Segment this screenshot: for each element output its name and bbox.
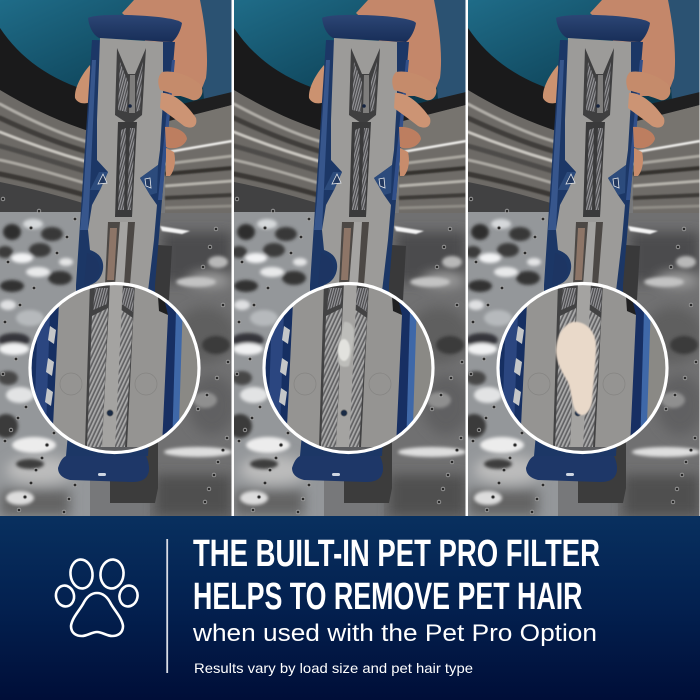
icon: paw print [54,558,139,636]
disclaimer: Results vary by load size and pet hair type [194,660,473,676]
photo panel: filter with lots of hair [462,0,700,516]
photo panel: clean filter [0,0,236,516]
magnified circle: clean filter [28,282,202,456]
magnified circle: large clump of hair [496,282,670,456]
photo panel: filter with some hair [228,0,470,516]
bottom banner [0,516,700,700]
magnified circle: small amount of hair [262,282,436,456]
subheading: when used with the Pet Pro Option [192,620,597,647]
divider [166,539,168,673]
